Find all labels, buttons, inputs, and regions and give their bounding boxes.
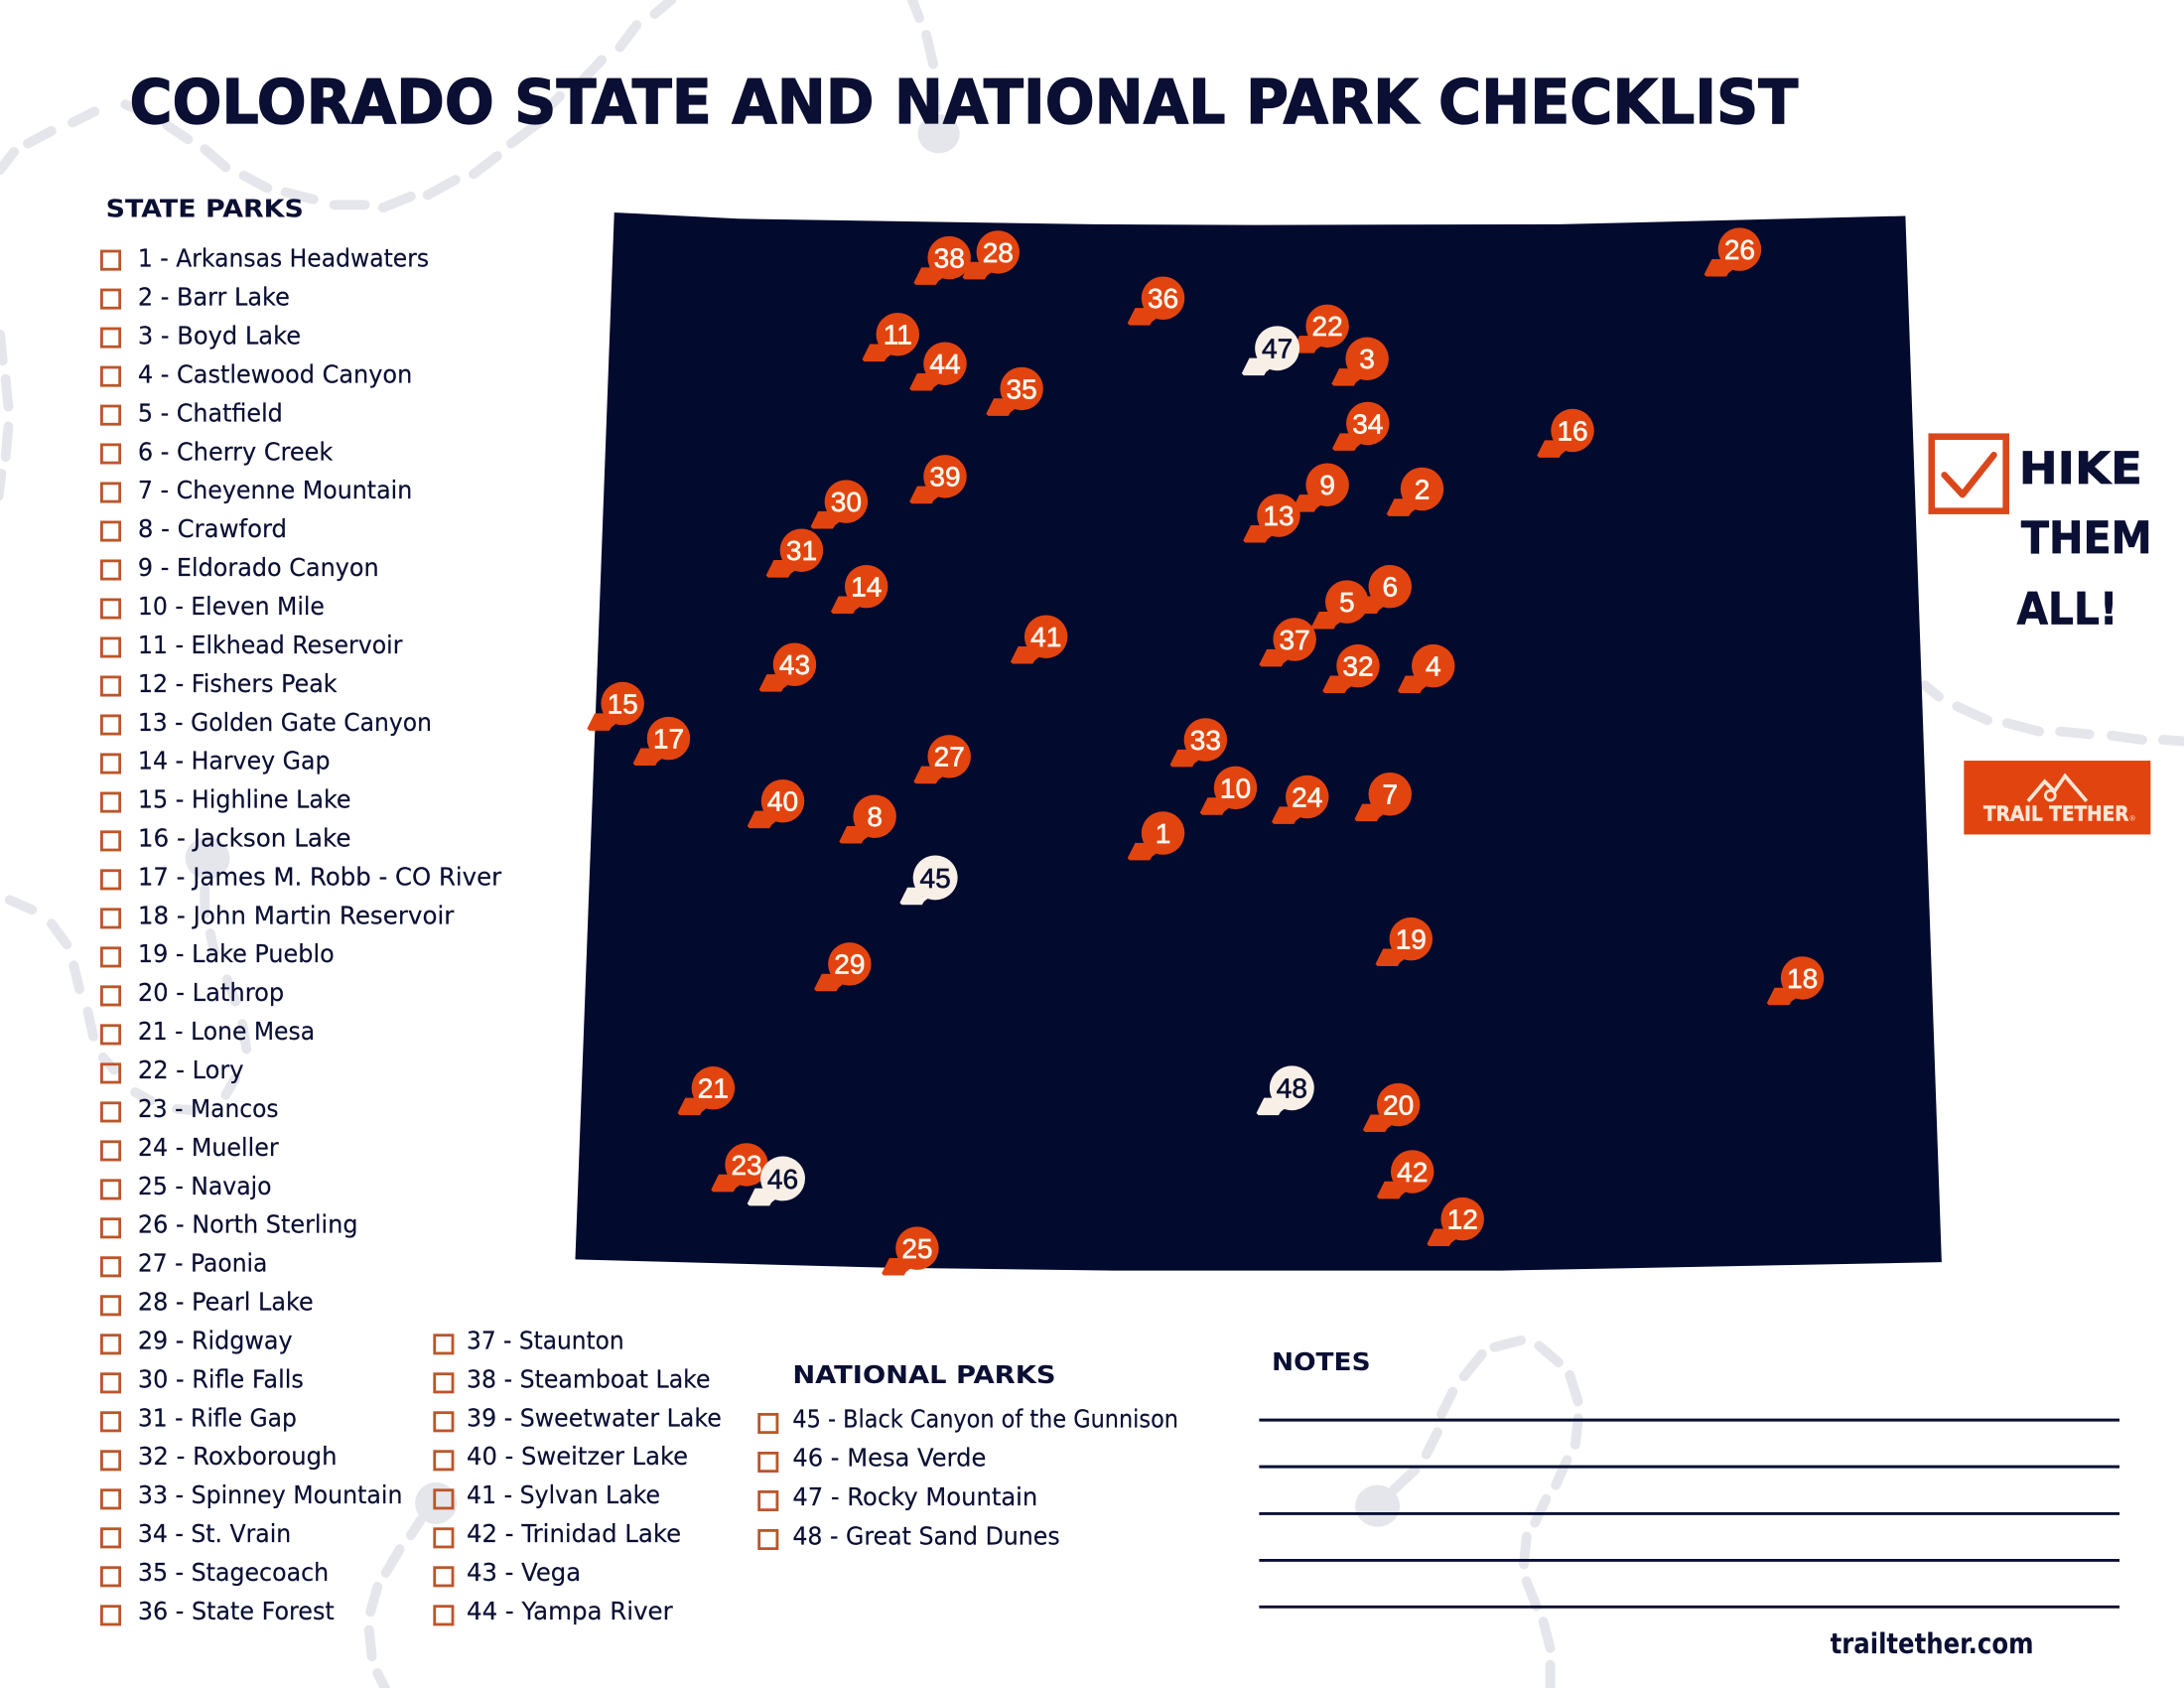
pin 35: 35 — [1007, 373, 1037, 404]
item 37: 37 - Staunton — [467, 1326, 624, 1354]
item 2: 2 - Barr Lake — [138, 283, 290, 312]
pin 4 — [1398, 644, 1454, 693]
pin 2: 2 — [1415, 474, 1430, 504]
pin 45 — [899, 855, 958, 905]
item 44: 44 - Yampa River — [467, 1597, 674, 1625]
pin 39 — [909, 455, 967, 503]
checklist: state parks column one — [101, 244, 502, 1625]
pin 37: 37 — [1280, 625, 1310, 655]
pin 34 — [1332, 402, 1390, 451]
pin 40: 40 — [767, 786, 798, 817]
pin 22 — [1292, 305, 1349, 353]
item 19: 19 - Lake Pueblo — [138, 939, 335, 968]
pin 17: 17 — [653, 723, 684, 754]
pin 15: 15 — [608, 688, 638, 719]
pin 26 — [1705, 227, 1761, 277]
item 42: 42 - Trinidad Lake — [467, 1519, 681, 1548]
pin 14: 14 — [851, 572, 882, 603]
pin 16 — [1537, 409, 1594, 458]
website url: trailtether.com — [1831, 1627, 2033, 1660]
item 17: 17 - James M. Robb - CO River — [138, 862, 502, 891]
pin 44 — [909, 342, 967, 391]
item 14: 14 - Harvey Gap — [138, 747, 331, 775]
item 23: 23 - Mancos — [138, 1094, 279, 1123]
pin 32: 32 — [1342, 650, 1374, 681]
pin 3 — [1331, 338, 1389, 386]
pin 25: 25 — [901, 1233, 933, 1264]
item 32: 32 - Roxborough — [138, 1442, 338, 1471]
pin 1: 1 — [1156, 818, 1170, 849]
pin 48: 48 — [1277, 1073, 1307, 1104]
pin 45: 45 — [920, 863, 951, 894]
pin 3: 3 — [1359, 344, 1375, 374]
pin 5 — [1311, 580, 1369, 629]
notes ruled lines — [1259, 1420, 2119, 1607]
item 1: 1 - Arkansas Headwaters — [138, 244, 429, 273]
pin 23: 23 — [731, 1150, 762, 1181]
pin 11 — [862, 313, 919, 361]
heading: state parks: STATE PARKS — [106, 194, 304, 222]
item 24: 24 - Mueller — [138, 1133, 279, 1162]
pin 14 — [831, 565, 887, 614]
pin 35 — [986, 367, 1043, 416]
item 10: 10 - Eleven Mile — [138, 592, 325, 621]
item 47: 47 - Rocky Mountain — [792, 1482, 1037, 1511]
item 3: 3 - Boyd Lake — [138, 322, 301, 351]
logo: Trail Tether: ® — [2129, 813, 2136, 822]
item 6: 6 - Cherry Creek — [138, 437, 334, 466]
pin 38: 38 — [934, 242, 965, 273]
item 48: 48 - Great Sand Dunes — [792, 1521, 1060, 1550]
pin 8 — [839, 794, 896, 844]
pin 38 — [913, 236, 971, 285]
icon: large orange checkbox — [1932, 437, 2006, 511]
pin 29 — [814, 942, 872, 991]
pin 13 — [1243, 493, 1300, 542]
pin 15 — [587, 682, 644, 731]
pin 40 — [748, 779, 804, 828]
item 28: 28 - Pearl Lake — [138, 1288, 314, 1317]
pin 2 — [1387, 468, 1443, 516]
pin 17 — [633, 717, 690, 766]
pin 27 — [913, 735, 971, 783]
item 18: 18 - John Martin Reservoir — [138, 901, 455, 929]
item 35: 35 - Stagecoach — [138, 1558, 329, 1587]
item 27: 27 - Paonia — [138, 1249, 267, 1278]
pin 26: 26 — [1724, 234, 1755, 265]
pin 41 — [1011, 615, 1067, 664]
pin 16: 16 — [1557, 415, 1588, 446]
pin 42: 42 — [1397, 1157, 1428, 1188]
pin 7 — [1354, 773, 1412, 821]
pin 9: 9 — [1319, 470, 1335, 500]
pin 21 — [678, 1066, 735, 1115]
title: COLORADO STATE AND NATIONAL PARK CHECKLIST — [129, 67, 1798, 138]
pin 30: 30 — [831, 487, 862, 517]
pin 22: 22 — [1312, 311, 1343, 342]
pin 33 — [1170, 718, 1227, 767]
pin 34: 34 — [1352, 408, 1383, 439]
item 16: 16 - Jackson Lake — [138, 823, 351, 852]
pin 12: 12 — [1447, 1203, 1478, 1234]
pin 37 — [1259, 618, 1316, 666]
pin 39: 39 — [929, 462, 961, 492]
item 9: 9 - Eldorado Canyon — [138, 553, 379, 582]
pin 44: 44 — [929, 349, 961, 379]
pin 36 — [1128, 277, 1184, 326]
item 8: 8 - Crawford — [138, 514, 287, 543]
item 39: 39 - Sweetwater Lake — [467, 1403, 722, 1432]
pin 20: 20 — [1383, 1089, 1414, 1120]
pin 47: 47 — [1262, 334, 1293, 364]
pin 48 — [1257, 1065, 1314, 1115]
pin 28 — [963, 230, 1020, 279]
item 41: 41 - Sylvan Lake — [467, 1480, 660, 1509]
pin 19: 19 — [1396, 923, 1427, 954]
pin 29: 29 — [834, 949, 865, 980]
item 33: 33 - Spinney Mountain — [138, 1480, 402, 1509]
pin 6 — [1354, 565, 1412, 614]
item 40: 40 - Sweitzer Lake — [467, 1442, 688, 1471]
slogan: hike them all: HIKE — [2019, 442, 2142, 494]
logo: Trail Tether — [1964, 761, 2150, 834]
item 38: 38 - Steamboat Lake — [467, 1364, 711, 1393]
pin 24: 24 — [1292, 781, 1322, 812]
item 46: 46 - Mesa Verde — [792, 1444, 986, 1473]
pin 43 — [759, 643, 816, 692]
item 45: 45 - Black Canyon of the Gunnison — [792, 1404, 1178, 1433]
pin 36: 36 — [1148, 283, 1178, 314]
pin 7: 7 — [1382, 779, 1398, 810]
pin 46 — [748, 1157, 805, 1205]
checklist: state parks column two — [435, 1326, 722, 1625]
item 26: 26 - North Sterling — [138, 1210, 358, 1239]
pin 43: 43 — [779, 649, 810, 680]
pin 23 — [711, 1143, 768, 1192]
item 30: 30 - Rifle Falls — [138, 1364, 304, 1393]
pin 12 — [1427, 1197, 1484, 1246]
pin 32 — [1322, 644, 1380, 693]
item 4: 4 - Castlewood Canyon — [138, 359, 412, 388]
pin 20 — [1363, 1083, 1420, 1132]
pin 42 — [1377, 1150, 1433, 1198]
slogan: hike them all: ALL! — [2017, 583, 2117, 635]
item 25: 25 - Navajo — [138, 1172, 272, 1200]
pin 47 — [1242, 326, 1299, 375]
slogan: hike them all: THEM — [2021, 511, 2152, 564]
pin 31 — [766, 528, 823, 578]
pin 8: 8 — [867, 801, 883, 832]
pin 46: 46 — [767, 1164, 798, 1195]
heading: national parks: NATIONAL PARKS — [792, 1360, 1056, 1389]
pin 21: 21 — [698, 1073, 729, 1104]
pin 6: 6 — [1382, 572, 1398, 603]
pin 30 — [811, 480, 868, 528]
checklist: national parks — [759, 1404, 1178, 1550]
pin 10 — [1200, 767, 1257, 815]
heading: notes: NOTES — [1272, 1347, 1371, 1376]
item 13: 13 - Golden Gate Canyon — [138, 708, 432, 737]
item 36: 36 - State Forest — [138, 1597, 335, 1625]
item 20: 20 - Lathrop — [138, 978, 284, 1007]
pin 18: 18 — [1787, 963, 1818, 994]
item 21: 21 - Lone Mesa — [138, 1017, 315, 1046]
map: Colorado state shape — [575, 212, 1942, 1271]
slogan: hike them all — [2017, 442, 2152, 635]
item 29: 29 - Ridgway — [138, 1326, 293, 1354]
pin 9 — [1292, 464, 1349, 512]
map pins: national parks — [748, 326, 1314, 1205]
pin 33: 33 — [1190, 725, 1221, 756]
item 31: 31 - Rifle Gap — [138, 1403, 297, 1432]
pin 13: 13 — [1263, 500, 1295, 531]
item 15: 15 - Highline Lake — [138, 785, 351, 814]
pin 27: 27 — [934, 742, 965, 773]
pin 31: 31 — [786, 535, 817, 566]
item 5: 5 - Chatfield — [138, 398, 283, 427]
pin 18 — [1767, 956, 1824, 1005]
item 12: 12 - Fishers Peak — [138, 669, 338, 698]
item 34: 34 - St. Vrain — [138, 1519, 291, 1548]
pin 5: 5 — [1339, 587, 1355, 618]
pin 1 — [1128, 811, 1184, 860]
logo: Trail Tether: TRAIL TETHER — [1983, 801, 2129, 825]
pin 10: 10 — [1220, 773, 1251, 803]
pin 24 — [1272, 775, 1329, 824]
item 7: 7 - Cheyenne Mountain — [138, 476, 412, 504]
pin 25 — [882, 1226, 939, 1275]
pin 41: 41 — [1030, 622, 1061, 652]
pin 28: 28 — [983, 237, 1014, 268]
pin 4: 4 — [1426, 650, 1441, 681]
map pins: state parks — [587, 227, 1824, 1275]
item 22: 22 - Lory — [138, 1055, 244, 1084]
item 11: 11 - Elkhead Reservoir — [138, 631, 403, 659]
pin 11: 11 — [884, 320, 912, 351]
pin 19 — [1376, 917, 1433, 966]
item 43: 43 - Vega — [467, 1558, 581, 1587]
